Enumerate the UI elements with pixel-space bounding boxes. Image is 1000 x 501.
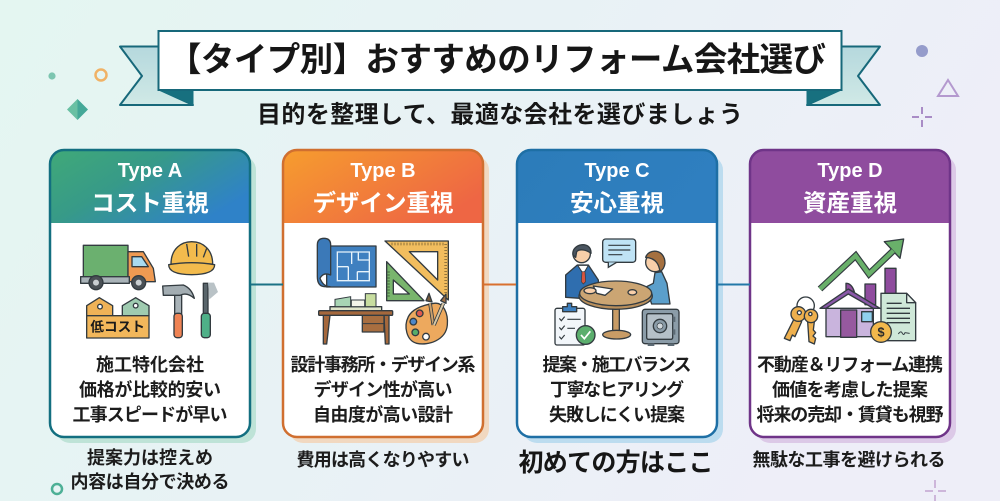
type label: Type A	[118, 160, 182, 182]
note: Type C: 初めての方はここ	[518, 449, 714, 477]
decorative shapes left	[48, 70, 106, 494]
features: デザイン性が高い	[314, 379, 452, 400]
note: Type A: 提案力は控えめ	[87, 447, 213, 468]
heading: コスト重視	[91, 190, 209, 216]
icons: growth arrow, house, document, keys: $	[877, 325, 885, 339]
icons: truck, helmet, tags, tools: 低コスト	[90, 319, 145, 334]
note: Type A: 内容は自分で決める	[70, 472, 230, 492]
features	[756, 355, 944, 425]
features: 不動産＆リフォーム連携	[757, 355, 943, 375]
note: Type D: 無駄な工事を避けられる	[752, 450, 946, 470]
heading: 安心重視	[570, 190, 664, 216]
panel: Type C	[517, 150, 723, 443]
connector lines	[251, 284, 750, 286]
icons: truck, helmet, tags, tools	[81, 242, 218, 338]
features: 丁寧なヒアリング	[550, 379, 684, 400]
type label: Type B	[350, 160, 416, 182]
type label: Type C	[584, 160, 650, 182]
features: 価値を考慮した提案	[772, 379, 928, 400]
decorative shapes right	[912, 45, 958, 501]
note: Type B: 費用は高くなりやすい	[296, 450, 470, 470]
features	[72, 355, 228, 425]
type label: Type D	[817, 160, 883, 182]
features: 設計事務所・デザイン系	[290, 354, 476, 375]
icons: blueprint, rulers, desk, palette	[317, 238, 448, 344]
heading: デザイン重視	[312, 189, 454, 216]
features: 提案・施工バランス	[542, 354, 692, 375]
icons: growth arrow, house, document, keys	[784, 239, 916, 344]
heading: 資産重視	[803, 190, 897, 216]
features: 自由度が高い設計	[313, 404, 453, 425]
features: 施工特化会社	[96, 355, 204, 375]
panel: Type D	[750, 150, 956, 443]
features	[542, 354, 692, 425]
features: 工事スピードが早い	[72, 404, 228, 425]
features: 価格が比較的安い	[79, 379, 221, 400]
icons: meeting, checklist, safe	[555, 239, 679, 346]
note: Type A	[70, 447, 230, 492]
features: 失敗しにくい提案	[549, 404, 685, 425]
subtitle: 目的を整理して、最適な会社を選びましょう	[257, 102, 743, 128]
features: 将来の売却・賃貸も視野	[756, 404, 944, 425]
title ribbon	[120, 31, 880, 106]
panel: Type A	[50, 150, 256, 443]
features	[290, 354, 476, 425]
panel: Type B	[283, 150, 489, 443]
title text: 【タイプ別】おすすめのリフォーム会社選び	[168, 42, 826, 79]
